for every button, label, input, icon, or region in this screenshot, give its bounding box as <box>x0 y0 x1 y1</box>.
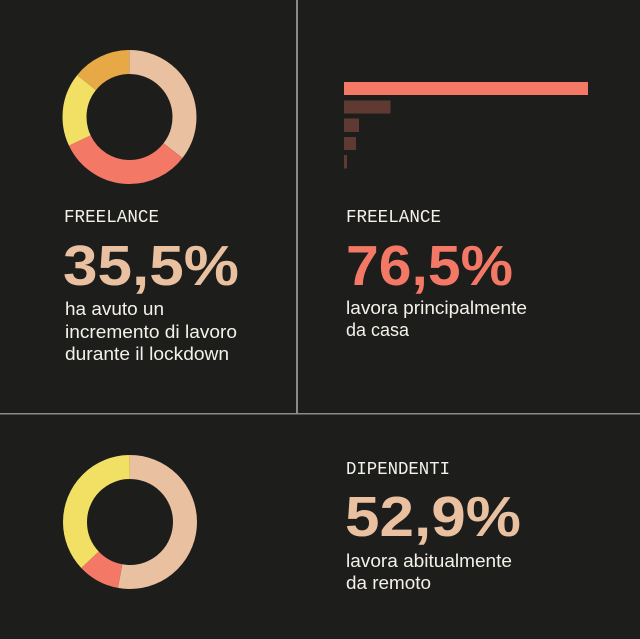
description: works from home: lavora principalmente <box>346 297 527 318</box>
panel: employees remote work <box>75 460 521 593</box>
description: works from home <box>346 297 527 340</box>
description: workload increase: incremento di lavoro <box>65 321 237 342</box>
label: freelance: FREELANCE <box>346 208 441 228</box>
description: workload increase: durante il lockdown <box>65 343 229 364</box>
description: usually remote: da remoto <box>346 572 431 593</box>
statistic: 35,5%: 35,5% <box>63 234 239 298</box>
donut chart: employees remote work <box>75 467 185 577</box>
bar chart: work location <box>344 82 588 168</box>
panel: freelance workload <box>63 62 239 364</box>
donut chart: freelance workload <box>74 62 184 172</box>
label: dipendenti: DIPENDENTI <box>346 460 450 480</box>
label: freelance: FREELANCE <box>64 208 159 228</box>
description: workload increase: ha avuto un <box>65 298 164 319</box>
description: works from home: da casa <box>346 319 410 340</box>
description: workload increase <box>65 298 237 364</box>
description: usually remote <box>346 550 512 593</box>
description: usually remote: lavora abitualmente <box>346 550 512 571</box>
panel: freelance work location <box>344 82 588 340</box>
statistic: 52,9%: 52,9% <box>345 485 521 549</box>
statistic: 76,5%: 76,5% <box>346 234 513 298</box>
